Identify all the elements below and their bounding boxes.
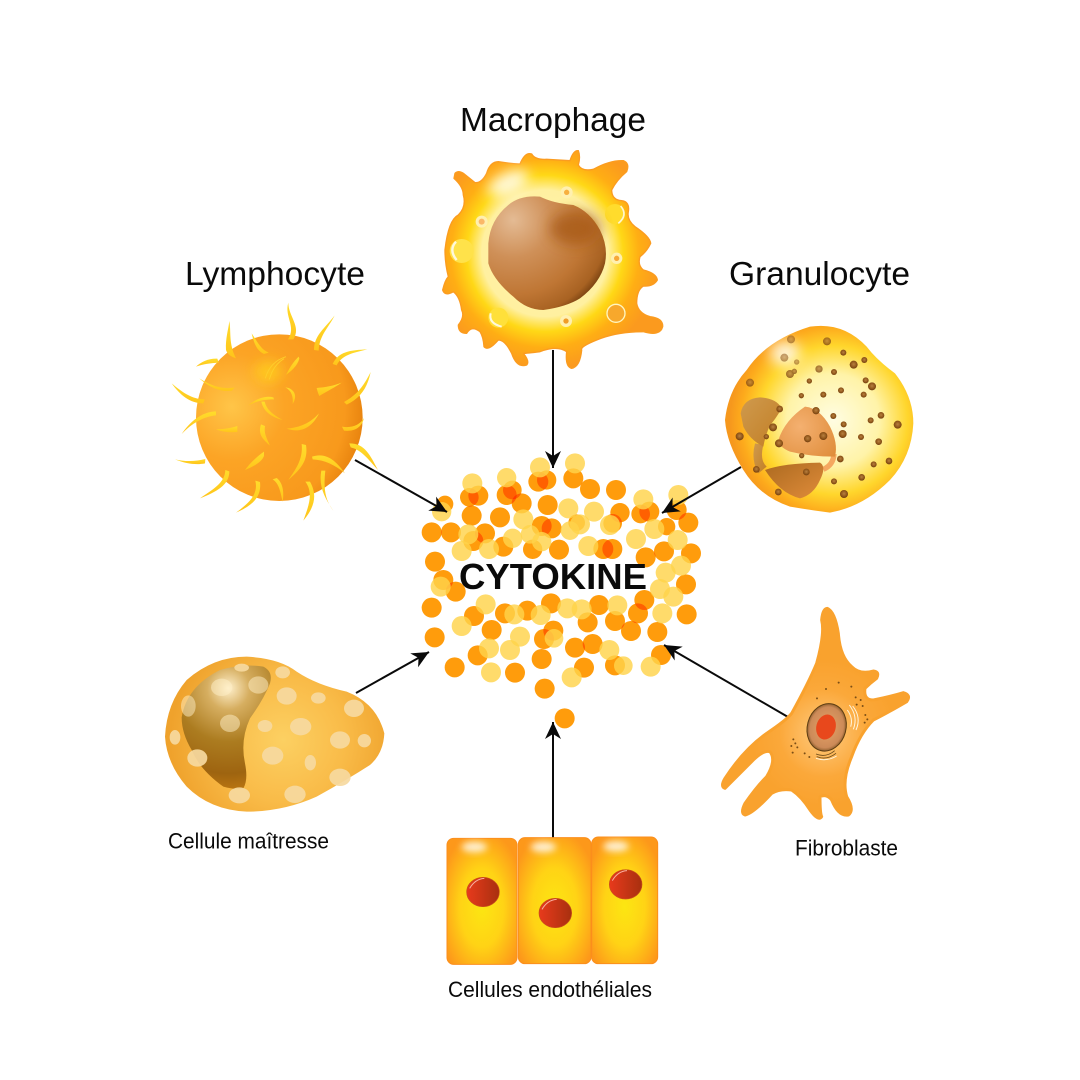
highlight bbox=[770, 341, 800, 366]
granules bbox=[170, 664, 371, 803]
cell: granulocyte bbox=[725, 326, 913, 513]
heading: Macrophage: Macrophage bbox=[460, 101, 646, 138]
cytokine particle cluster bbox=[422, 453, 701, 728]
cells: endothelial cells bbox=[447, 837, 658, 964]
label: Cellule maîtresse: Cellule maîtresse bbox=[168, 828, 329, 854]
arrow: mast cell to cytokine bbox=[356, 652, 429, 693]
cut-away interior bbox=[182, 666, 271, 789]
nucleus bbox=[802, 699, 852, 756]
cell right bbox=[592, 837, 658, 964]
arrow: lymphocyte to cytokine bbox=[355, 460, 447, 512]
organelles bbox=[790, 682, 868, 760]
nucleus lobes bbox=[741, 397, 836, 498]
label: Cellules endothéliales: Cellules endothéliales bbox=[448, 977, 652, 1002]
arrow: endothelial cells to cytokine bbox=[552, 722, 554, 838]
nucleus bbox=[488, 196, 606, 310]
surface hairs bbox=[172, 303, 378, 521]
cell: lymphocyte bbox=[172, 303, 378, 521]
arrow: fibroblast to cytokine bbox=[664, 645, 788, 717]
vacuoles bbox=[450, 186, 625, 328]
arrow: macrophage to cytokine bbox=[552, 350, 554, 468]
cell: fibroblast bbox=[722, 608, 909, 818]
heading: Lymphocyte: Lymphocyte bbox=[185, 255, 365, 292]
cell left bbox=[447, 838, 517, 964]
heading: Granulocyte: Granulocyte bbox=[729, 255, 910, 292]
title: CYTOKINE: CYTOKINE bbox=[459, 556, 647, 597]
label: Fibroblaste: Fibroblaste bbox=[795, 836, 898, 860]
cell: macrophage bbox=[443, 151, 663, 368]
arrow: granulocyte to cytokine bbox=[662, 467, 741, 513]
granules bbox=[736, 335, 902, 498]
cell: mast cell bbox=[165, 657, 384, 812]
cell middle bbox=[518, 838, 591, 964]
highlight bbox=[484, 165, 532, 202]
